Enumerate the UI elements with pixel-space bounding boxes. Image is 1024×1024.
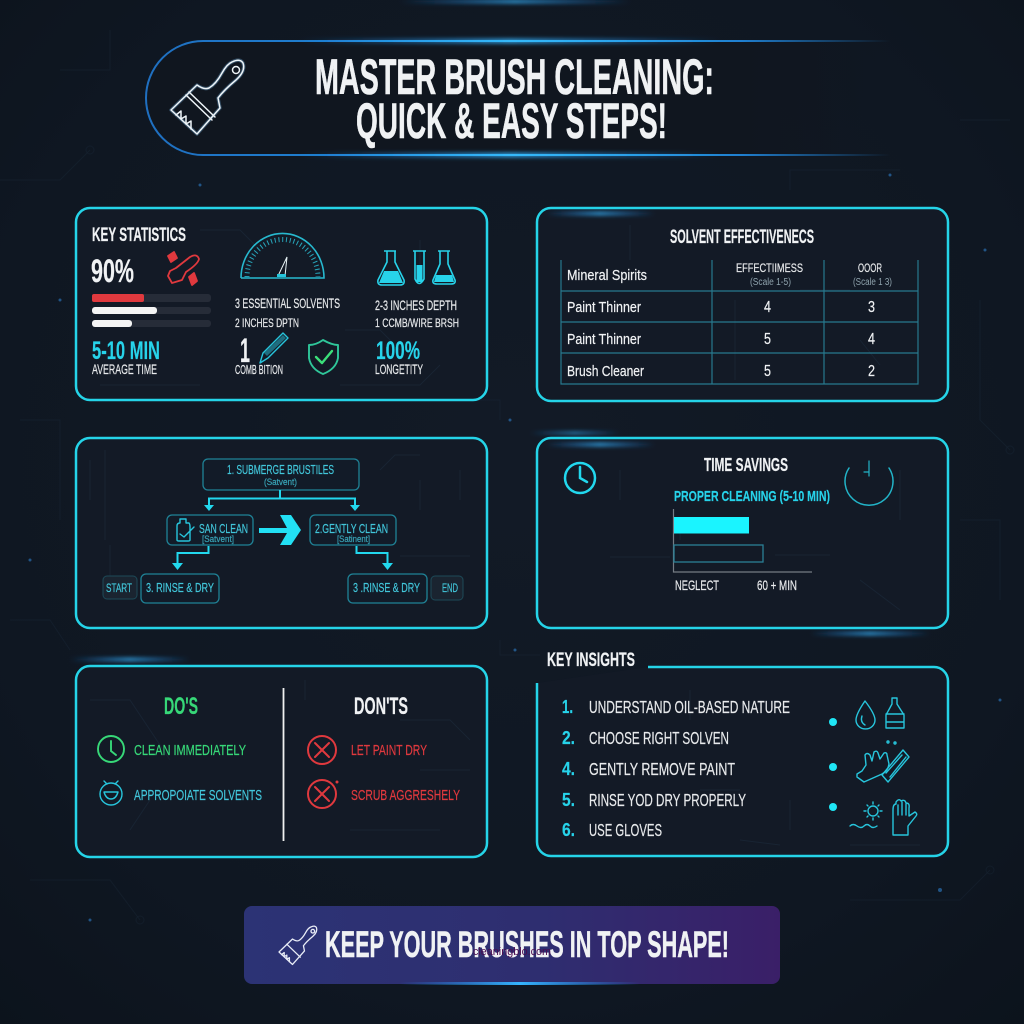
insight 5 (562, 820, 662, 840)
big arrow (259, 515, 301, 545)
depth stats: 2-3 INCHES DEPTH (375, 297, 457, 313)
insight 3 (562, 759, 735, 779)
step 2 box: 2.GENTLY CLEAN (315, 522, 388, 536)
don't item: let paint dry: LET PAINT DRY (351, 742, 427, 759)
table row: brush cleaner: Brush Cleaner (567, 363, 644, 380)
icon: red x one (308, 736, 336, 764)
bar chart: NEGLECT (675, 577, 719, 593)
progress bars (92, 294, 211, 327)
call to action text: KEEP YOUR BRUSHES IN TOP SHAPE! (325, 924, 729, 965)
icon: solvent can (100, 781, 122, 805)
icon: hands and comb (857, 741, 909, 782)
end box (431, 576, 463, 600)
step 2 box (310, 515, 396, 545)
panel: solvent effectiveness table (537, 208, 948, 401)
insight 4: 5. (562, 790, 575, 810)
panel: key statistics (76, 208, 487, 400)
insight 2: CHOOSE RIGHT SOLVEN (589, 728, 729, 748)
panel: time savings (537, 438, 948, 628)
heading: key statistics: KEY STATISTICS (92, 225, 186, 246)
icon: comb (260, 333, 288, 363)
table row: brush cleaner: 2 (868, 363, 875, 380)
arrows from step 1 (204, 490, 360, 511)
table header row: Mineral Spirits (567, 267, 647, 284)
depth stats: 100% (376, 337, 420, 365)
solvent stats: 2 INCHES DPTN (235, 316, 299, 330)
do item: clean immediately: CLEAN IMMEDIATELY (134, 742, 246, 759)
icon: shield check (309, 340, 338, 374)
panel: key insights (537, 650, 948, 856)
icon: drop and bottle (856, 698, 904, 729)
table row: paint thinner 2: 4 (868, 331, 875, 348)
heading: don'ts: DON'TS (354, 693, 408, 720)
step 1 box: (Satvent) (264, 477, 297, 487)
stat: 90%: 90% (91, 253, 134, 289)
insight 2 (562, 728, 729, 748)
icon: gauge (241, 233, 324, 278)
table grid (561, 260, 918, 384)
step 3 right box (348, 574, 427, 603)
heading: do's: DO'S (164, 693, 198, 720)
table row: paint thinner 2 (567, 331, 875, 348)
insight 1: 1. (562, 697, 573, 717)
icon: clock (565, 463, 595, 493)
call to action banner (244, 906, 780, 985)
heading: time savings: TIME SAVINGS (704, 455, 788, 475)
table row: paint thinner: Paint Thinner (567, 299, 641, 316)
title text: MASTER BRUSH CLEANING: (315, 49, 714, 105)
watermark: cleaningblo.com (473, 946, 551, 958)
insight 2: 2. (562, 728, 575, 748)
bar chart: 60 + MIN (757, 577, 797, 593)
solvent stats: 3 ESSENTIAL SOLVENTS (235, 295, 340, 311)
step 2 box: [Satinent] (337, 534, 370, 544)
step 3 left box (141, 574, 219, 603)
table row: paint thinner (567, 299, 875, 316)
stat: average time: 5-10 MIN (92, 337, 160, 365)
title text (315, 49, 714, 149)
icon: sun, water and glove (850, 800, 917, 835)
end box: END (442, 583, 458, 595)
insight 1 (562, 697, 790, 717)
icon: footer brush (279, 926, 317, 964)
left clean box: [Satvent] (202, 534, 234, 544)
table header row: (Scale 1 3) (853, 277, 892, 288)
left clean box: SAN CLEAN (199, 522, 248, 536)
icon: paint brush (171, 60, 244, 134)
insight 4: RINSE YOD DRY PROPERLY (589, 790, 746, 810)
bar chart (674, 509, 812, 593)
icon: crossed out brush (168, 252, 199, 285)
heading: solvent effectiveness: SOLVENT EFFECTIVENECS (670, 227, 814, 248)
table row: brush cleaner: 5 (764, 363, 771, 380)
depth stats: LONGETITY (375, 361, 423, 377)
decorative light streaks (70, 0, 930, 661)
insight 3: 4. (562, 759, 575, 779)
insight 5: 6. (562, 820, 575, 840)
insight 4 (562, 790, 746, 810)
solvent stats: 1 (240, 332, 250, 370)
stat: average time (92, 337, 160, 377)
chart label: PROPER CLEANING (5-10 MIN) (674, 488, 830, 505)
depth stats (375, 297, 459, 377)
icon: flasks (378, 251, 455, 285)
left clean box (167, 515, 253, 545)
title banner (146, 39, 890, 157)
table row: paint thinner 2: Paint Thinner (567, 331, 641, 348)
icon: dial (845, 461, 893, 505)
bullet dots (829, 718, 837, 811)
icon: green clock (98, 736, 124, 762)
solvent stats (235, 295, 340, 377)
stat: average time: AVERAGE TIME (92, 361, 157, 377)
step 3 right box: 3 .RINSE & DRY (353, 581, 420, 595)
step 1 box: 1. SUBMERGE BRUSTILES (227, 463, 334, 477)
panel: process flowchart (76, 438, 487, 628)
don't item: scrub aggressively: SCRUB AGGRESHELY (351, 787, 460, 804)
step 1 box (203, 459, 359, 490)
insight 5: USE GLOVES (589, 820, 662, 840)
do item: appropriate solvents: APPROPOIATE SOLVENTS (134, 787, 262, 804)
step 3 left box: 3. RINSE & DRY (146, 581, 214, 595)
table row: paint thinner 2: 5 (764, 331, 771, 348)
title text: QUICK & EASY STEPS! (356, 93, 667, 149)
table header row: OOOR (858, 261, 882, 275)
insight 3: GENTLY REMOVE PAINT (589, 759, 735, 779)
table header row: EFFECTIIMESS (736, 261, 803, 275)
start box: START (106, 583, 132, 595)
table row: brush cleaner (567, 363, 875, 380)
panel: dos and don'ts (76, 666, 487, 857)
solvent stats: COMB BITION (235, 362, 283, 377)
table header row: (Scale 1-5) (750, 277, 791, 288)
table header row (567, 261, 892, 288)
insight 1: UNDERSTAND OIL-BASED NATURE (589, 697, 790, 717)
arrows to rinse steps (172, 546, 393, 570)
table row: paint thinner: 3 (868, 299, 875, 316)
depth stats: 1 CCMB/WIRE BRSH (375, 316, 459, 330)
heading: key insights: KEY INSIGHTS (547, 650, 635, 671)
table row: paint thinner: 4 (764, 299, 771, 316)
icon: red x two (308, 780, 338, 808)
start box (103, 576, 137, 599)
